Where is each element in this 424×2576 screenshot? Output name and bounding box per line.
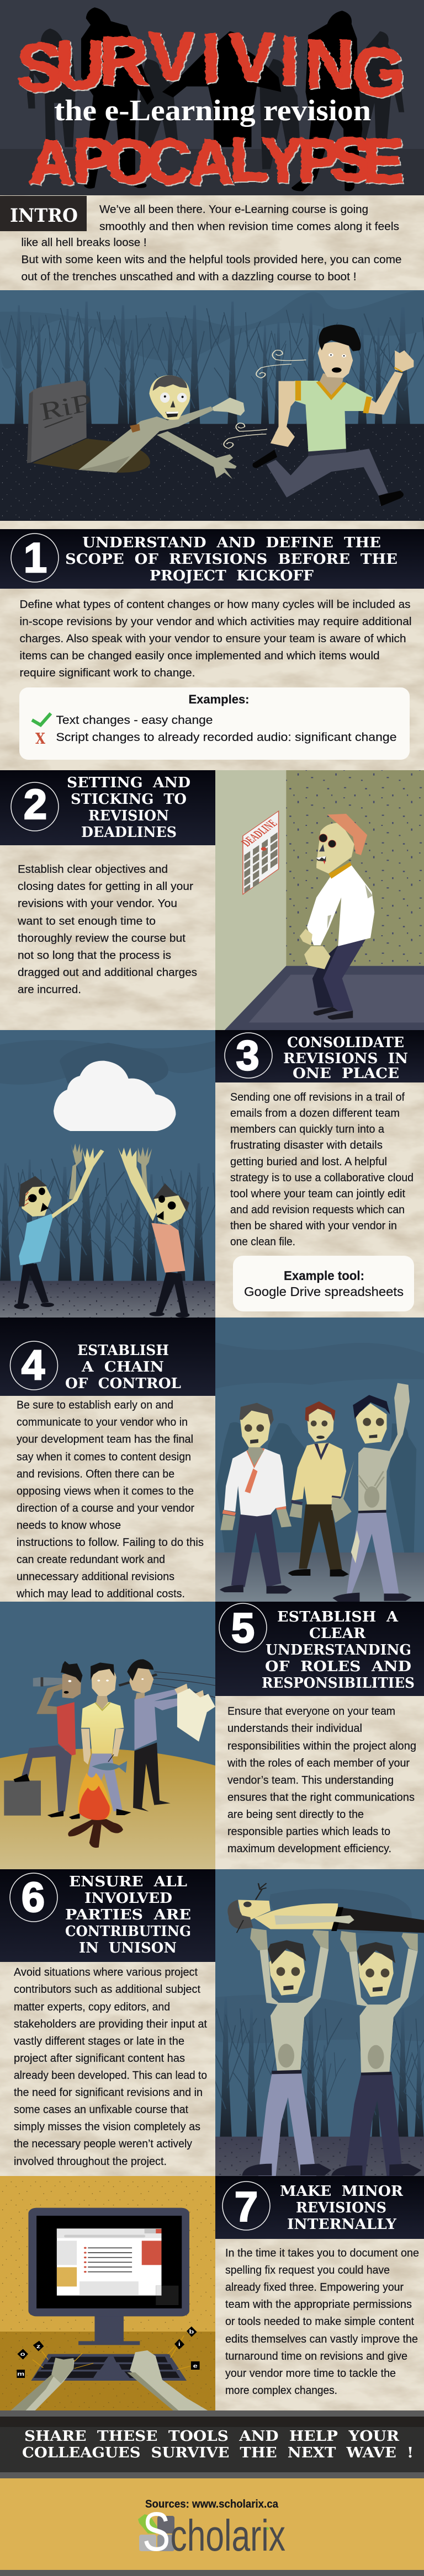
panel: step 2 [0, 770, 424, 1030]
step 3 text: tool where your team can jointly edit [230, 1188, 405, 1200]
step 7 text: already fixed three. Empowering your [225, 2281, 404, 2294]
step 6 text: Avoid situations where various project [14, 1966, 198, 1978]
man running away [252, 324, 414, 506]
step 6 text: involved throughout the project. [14, 2156, 167, 2168]
zombie crawling from grave [33, 375, 245, 479]
step 3 text: strategy is to use a collaborative cloud [230, 1172, 414, 1184]
step 3 header band [215, 1030, 424, 1082]
step 2 text: Establish clear objectives and [18, 863, 168, 876]
icon: deadline calendar: DEADLINE [237, 818, 281, 849]
illustration: team around a campfire [0, 1602, 215, 1869]
step 5 text: responsible parties which leads to [227, 1826, 390, 1838]
step 6 heading: ENSURE ALL [69, 1874, 187, 1890]
step 2 heading [67, 775, 190, 841]
heading: APOCALYPSE: APOCALYPSE [29, 125, 404, 196]
step 5 text: understands their individual [227, 1722, 362, 1735]
body carried overhead [227, 1883, 424, 1933]
step 4 text: say when it comes to content design [17, 1451, 191, 1463]
step 7 heading [280, 2183, 403, 2233]
step 1 text: items can be changed easily once implemented and which items would [20, 650, 380, 662]
step 2 number badge: 2 [24, 781, 47, 828]
campfire and fish [68, 1754, 127, 1848]
step 1 heading [65, 535, 398, 584]
step 4 text: opposing views when it comes to the [17, 1485, 194, 1497]
step 5 text: Ensure that everyone on your team [227, 1705, 395, 1718]
step 7 text: spelling fix request you could have [225, 2264, 390, 2276]
zombie in white shirt and tie [220, 1403, 292, 1593]
step 7 heading: INTERNALLY [287, 2216, 396, 2233]
step 7 text: In the time it takes you to document one [225, 2247, 419, 2259]
step 7 text: edits themselves can vastly improve the [225, 2333, 418, 2345]
illustration: zombie rising from grave chasing a man [0, 290, 424, 521]
step 3 text: getting buried and lost. A helpful [230, 1156, 387, 1168]
heading: SURVIVING: SURVIVING [17, 19, 405, 110]
step 4 heading [65, 1342, 181, 1392]
step 2 text: closing dates for getting in all your [18, 881, 193, 893]
step 6 text: already been developed. This can lead to [14, 2070, 207, 2082]
step 3 heading: REVISIONS IN [283, 1050, 408, 1067]
step 3 text [230, 1091, 414, 1248]
step 2 heading: DEADLINES [81, 824, 177, 841]
step 7 heading: MAKE MINOR [280, 2183, 403, 2200]
step 5 heading: CLEAR [309, 1625, 365, 1642]
zombie in yellow shirt [288, 1401, 349, 1576]
step 2 header band [0, 770, 215, 845]
step 6 heading: IN UNISON [79, 1940, 177, 1956]
icon: keyboard and flying keys: z [36, 2343, 40, 2349]
step 4 text [16, 1399, 204, 1600]
callout: example tool: Example tool: [284, 1268, 364, 1283]
step 2 text: not so long that the process is [18, 950, 171, 962]
step 5 number badge: 5 [231, 1605, 255, 1652]
icon: cloud [54, 1061, 176, 1131]
step 3 text: then be shared with your vendor in [230, 1220, 397, 1232]
icon: tombstone: RiP [33, 389, 98, 426]
step 5 number badge [219, 1603, 267, 1652]
step 4 heading: OF CONTROL [65, 1375, 181, 1392]
step 1 text: require significant work to change. [20, 667, 195, 679]
step 1 text [20, 599, 412, 679]
zombie left [14, 1144, 104, 1309]
panel: step 5 [0, 1602, 424, 1869]
step 6 header band [0, 1869, 215, 1962]
icon: keyboard and flying keys: m [17, 2371, 24, 2377]
step 4 text: needs to know whose [17, 1519, 121, 1532]
step 5 text: maximum development efficiency. [227, 1843, 391, 1855]
panel: step 6 [0, 1869, 424, 2176]
panel: title header [0, 0, 424, 196]
zombie right [118, 1147, 189, 1318]
logo: Scholarix: Scholarix [142, 2501, 285, 2563]
step 5 heading: OF ROLES AND [265, 1658, 411, 1675]
intro label: INTRO [10, 205, 78, 227]
step 4 text: which may lead to additional costs. [16, 1588, 185, 1600]
step 1 number badge [11, 534, 59, 582]
illustration: zombies carrying a body [215, 1869, 424, 2176]
step 5 text: with the roles of each member of your [227, 1757, 410, 1769]
step 1 text: Define what types of content changes or how many cycles will be included as [20, 599, 411, 611]
illustration: zombies reaching for the cloud [0, 1030, 215, 1318]
step 5 heading: RESPONSIBILITIES [262, 1675, 415, 1692]
step 2 heading: REVISION [88, 808, 169, 824]
step 4 heading: ESTABLISH [77, 1342, 169, 1359]
step 6 text: matter experts, copy editors, and [14, 2001, 170, 2013]
illustration: three zombies standing [215, 1318, 424, 1602]
share text: SHARE THESE TOOLS AND HELP YOUR [24, 2428, 399, 2445]
step 5 text [227, 1705, 416, 1855]
panel: intro [0, 196, 402, 283]
step 4 number badge: 4 [22, 1342, 45, 1389]
illustration: zombie silhouettes [27, 8, 404, 191]
step 3 text: emails from a dozen different team [230, 1107, 400, 1119]
step 2 text: dragged out and additional charges [18, 967, 197, 979]
panel: step 4 [0, 1318, 424, 1602]
panel: step 1 [0, 529, 424, 760]
icon: computer monitor [28, 2208, 189, 2345]
zombie left lifting [242, 1928, 331, 2176]
step 4 text: direction of a course and your vendor [17, 1502, 194, 1514]
intro text: We’ve all been there. Your e-Learning course is going [99, 204, 368, 216]
step 6 text: the necessary people weren’t actively [14, 2138, 192, 2150]
step 6 text: project after significant content has [14, 2052, 185, 2065]
callout: examples [19, 687, 410, 760]
icon: keyboard and flying keys: i [178, 2341, 181, 2347]
step 5 text: vendor’s team. This understanding [227, 1774, 394, 1786]
step 3 text: Sending one off revisions in a trail of [230, 1091, 405, 1103]
icon: deadline calendar [237, 811, 281, 894]
step 2 text: want to set enough time to [17, 915, 156, 927]
step 6 number badge [10, 1873, 57, 1922]
step 7 header band [215, 2176, 424, 2239]
step 4 header band [0, 1318, 215, 1396]
step 2 number badge [11, 781, 59, 831]
step 1 text: charges. Also speak with your vendor to ensure your team is aware of which [20, 633, 406, 645]
icon: keyboard and flying keys: b [189, 2329, 194, 2335]
step 4 heading: A CHAIN [81, 1359, 164, 1375]
step 7 text: more complex changes. [225, 2385, 337, 2397]
step 3 text: members can quickly turn into a [230, 1123, 385, 1135]
man with telescope [13, 1661, 82, 1817]
panel: step 3 [0, 1030, 424, 1318]
share text [22, 2428, 414, 2461]
step 3 number badge: 3 [236, 1032, 259, 1079]
panel: footer [0, 2478, 424, 2576]
intro text: out of the trenches unscathed and with a dazzling course to boot ! [21, 271, 357, 283]
step 3 text: frustrating disaster with details [230, 1139, 383, 1151]
icon: keyboard and flying keys [17, 2327, 200, 2381]
subtitle: the e-Learning revision [54, 94, 371, 127]
step 7 heading: REVISIONS [296, 2200, 386, 2216]
icon: tombstone [27, 380, 98, 463]
intro label [0, 196, 87, 231]
step 2 text: are incurred. [18, 984, 81, 996]
callout: examples: Script changes to already recorded audio: significant change [56, 731, 396, 744]
man hanging paper [127, 1659, 215, 1811]
grey box [4, 1780, 41, 1816]
step 6 text: stakeholders are providing their input at [14, 2018, 207, 2030]
illustration: zombie typing at a computer [0, 2176, 215, 2410]
zombie hands on keyboard [11, 2350, 208, 2410]
step 7 text [225, 2247, 419, 2397]
step 3 heading: ONE PLACE [293, 1065, 399, 1082]
step 4 text: Be sure to establish early on and [17, 1399, 173, 1411]
panel: share call to action [0, 2410, 424, 2478]
step 7 text: turnaround time on revisions and give [225, 2350, 407, 2362]
icon: red x: X [35, 730, 45, 748]
step 6 heading: PARTIES ARE [65, 1907, 191, 1923]
step 1 heading: UNDERSTAND AND DEFINE THE [82, 535, 381, 551]
zombie right lifting [331, 1931, 421, 2176]
sources: Sources: www.scholarix.ca [145, 2498, 279, 2510]
step 6 text [14, 1966, 207, 2168]
callout: example tool: Google Drive spreadsheets [244, 1284, 404, 1299]
step 7 text: team with the appropriate permissions [225, 2298, 412, 2311]
step 7 text: or tools needed to make simple content [225, 2316, 414, 2328]
step 2 heading: SETTING AND [67, 775, 190, 791]
step 1 heading: PROJECT KICKOFF [150, 568, 314, 584]
icon: keyboard and flying keys: e [193, 2363, 198, 2369]
step 6 heading: INVOLVED [84, 1890, 172, 1907]
step 5 text: ensures that the right communications [227, 1791, 415, 1804]
step 4 text: can create redundant work and [17, 1554, 165, 1566]
step 5 heading: ESTABLISH A [277, 1609, 399, 1625]
step 5 text: responsibilities within the project along [227, 1740, 416, 1752]
wind swirls [224, 350, 306, 449]
callout: example tool [233, 1256, 414, 1311]
step 2 text [17, 863, 197, 996]
illustration: zombie staring at deadline calendar [215, 770, 424, 1030]
zombie waving [331, 1383, 411, 1602]
icon: keyboard and flying keys: o [20, 2351, 25, 2357]
intro text: But with some keen wits and the helpful tools provided here, you can come [21, 254, 402, 266]
step 3 text: one clean file. [230, 1236, 295, 1248]
step 7 text: your vendor more time to tackle the [225, 2367, 396, 2380]
step 4 text: instructions to follow. Failing to do this [17, 1537, 204, 1549]
step 1 number badge: 1 [24, 535, 47, 582]
step 5 heading: UNDERSTANDING [266, 1642, 411, 1658]
step 2 heading: STICKING TO [71, 791, 187, 808]
step 6 text: the need for significant revisions and in [14, 2087, 203, 2099]
step 1 text: in-scope revisions by your vendor and which activities may require additional [20, 616, 412, 628]
step 3 number badge [225, 1032, 272, 1079]
intro text: like all hell breaks loose ! [21, 237, 147, 249]
step 6 text: contributors such as additional subject [14, 1983, 200, 1996]
step 1 heading: SCOPE OF REVISIONS BEFORE THE [65, 551, 398, 568]
step 7 number badge: 7 [235, 2184, 258, 2231]
step 5 header band [215, 1602, 424, 1696]
zombie in white shirt [300, 814, 374, 1020]
man in yellow shirt [69, 1662, 131, 1819]
step 6 text: vastly different stages or late in the [14, 2035, 184, 2047]
step 6 heading [65, 1874, 191, 1956]
intro text [21, 204, 402, 283]
step 4 text: unnecessary additional revisions [17, 1571, 174, 1583]
share text: COLLEAGUES SURVIVE THE NEXT WAVE ! [22, 2445, 414, 2461]
step 4 text: and revisions. Often there can be [17, 1468, 174, 1480]
icon: green check [32, 713, 51, 725]
callout: examples: Text changes - easy change [56, 714, 213, 727]
step 3 heading: CONSOLIDATE [287, 1034, 404, 1051]
step 4 number badge [10, 1341, 57, 1390]
step 2 text: revisions with your vendor. You [18, 898, 177, 910]
intro text: smoothly and then when revision time comes along it feels [99, 221, 399, 233]
step 7 number badge [222, 2182, 270, 2231]
step 6 number badge: 6 [22, 1874, 45, 1921]
step 5 heading [262, 1609, 415, 1692]
step 6 text: some cases an unfixable course that [14, 2104, 188, 2116]
panel: step 7 [0, 2176, 424, 2410]
step 2 text: thoroughly review the course but [18, 932, 186, 945]
step 6 heading: CONTRIBUTING [65, 1923, 191, 1940]
step 3 heading [283, 1034, 408, 1082]
step 4 text: communicate to your vendor who in [17, 1416, 188, 1428]
step 1 header band [0, 529, 424, 589]
step 3 text: and add revision requests which can [230, 1204, 405, 1216]
callout: examples: Examples: [189, 692, 250, 706]
step 4 text: your development team has the final [17, 1433, 193, 1446]
step 6 text: simply misses the vision completely as [14, 2121, 200, 2133]
step 5 text: are being sent directly to the [227, 1809, 364, 1821]
